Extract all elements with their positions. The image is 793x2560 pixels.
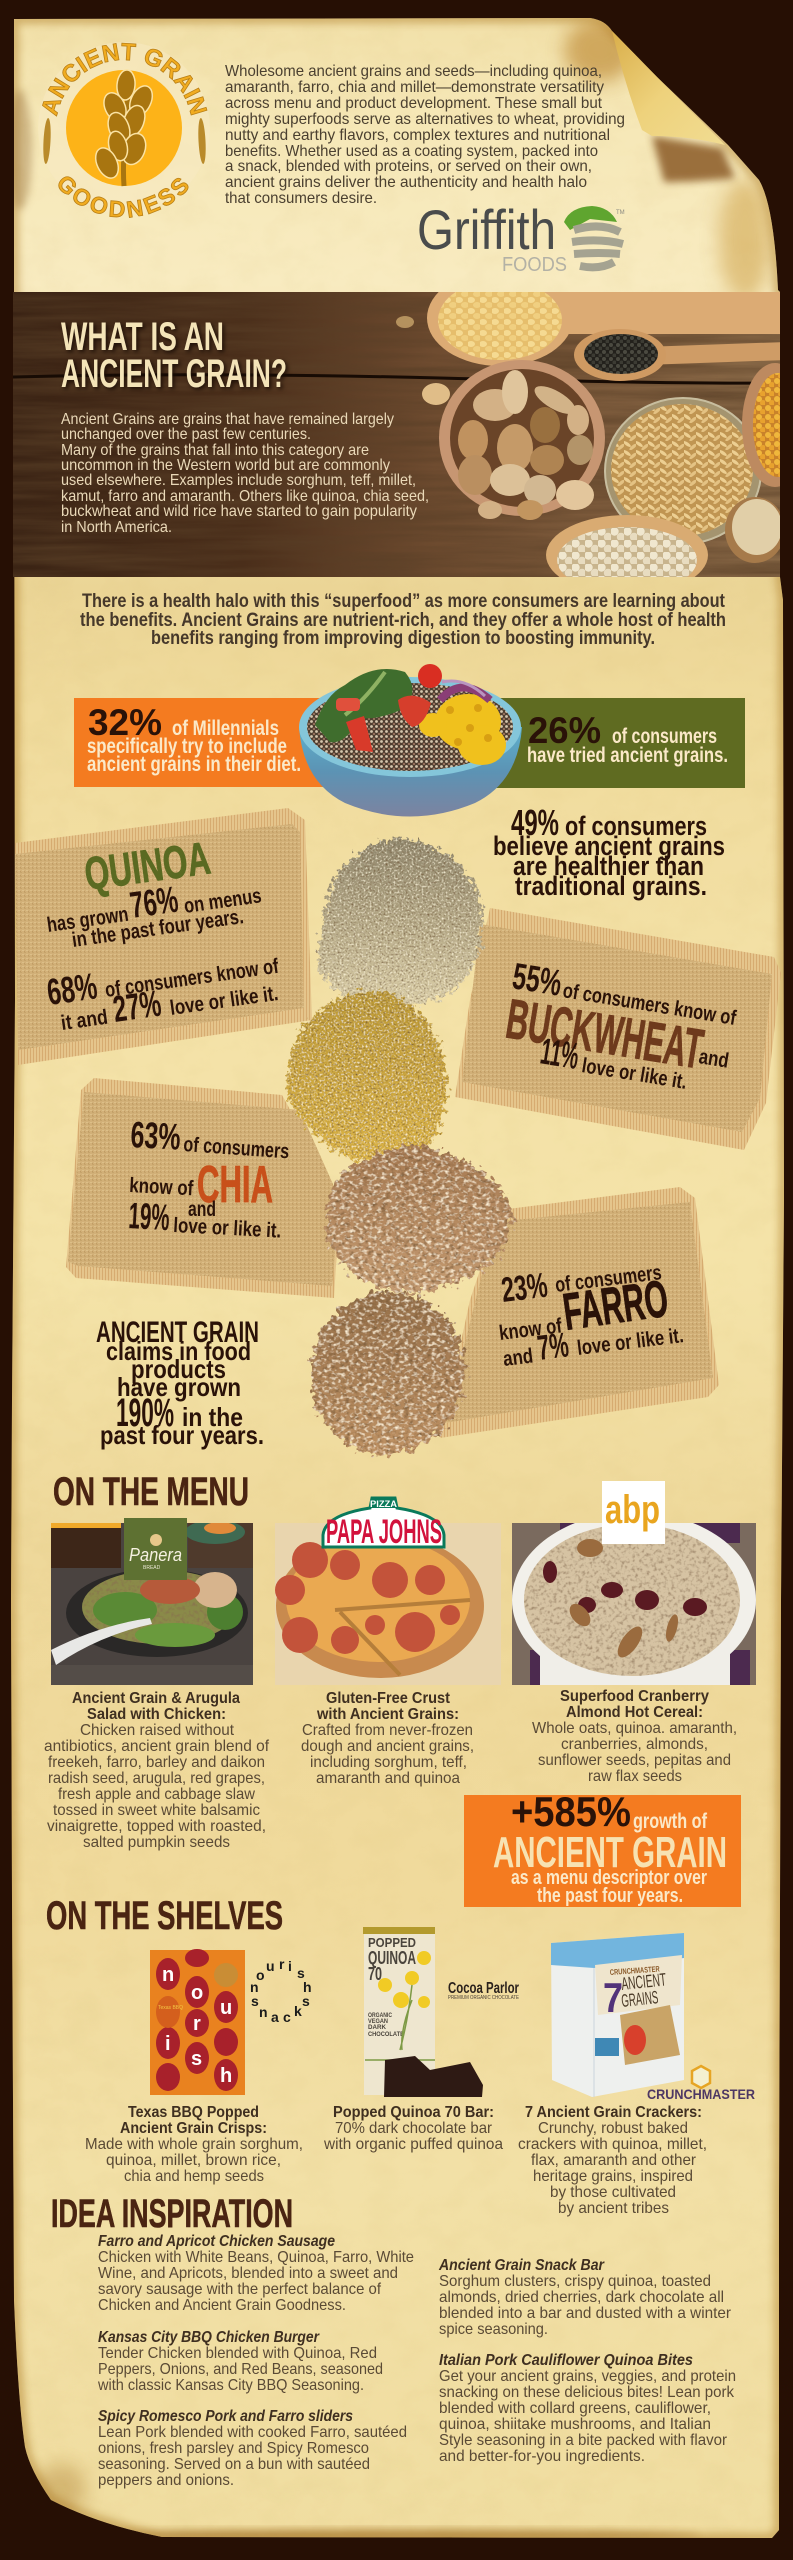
ideas: left column: Tender Chicken blended with Quinoa, Red [98,2345,377,2362]
caption: nourish: Ancient Grain Crisps: [120,2120,267,2137]
text: farro stats: 23% [499,1266,550,1310]
caption: papa johns: dough and ancient grains, [301,1738,474,1755]
callout: +585% growth: the past four years. [537,1885,683,1907]
stat: ancient grain claims: in the [182,1402,243,1432]
stat bar: 32% of millennials: of Millennials [172,717,279,740]
text: 55% of consumers: 55% [510,955,565,1004]
text: farro stats: of consumers [554,1261,663,1297]
ideas: left column: seasoning. Served on a bun with sautéed [98,2456,370,2473]
heading: WHAT IS AN [61,315,224,359]
burlap patch: chia: of consumers [183,1133,290,1163]
ideas: left column: onions, fresh parsley and Spicy Romesco [98,2440,369,2457]
caption: panera: Chicken raised without [80,1722,235,1739]
caption: abp: sunflower seeds, pepitas and [538,1752,731,1769]
product: nourish bag: n [162,1964,174,1986]
ideas: right column: spice seasoning. [439,2321,548,2338]
logo: cocoa parlor: PREMIUM ORGANIC CHOCOLATE [448,1995,520,2001]
definition text: Ancient Grains are grains that have remained largely [61,411,394,428]
callout: +585% growth: +585% [511,1788,631,1835]
product: popped quinoa bar: POPPED [368,1935,416,1950]
ideas: left column: savory sausage with the perfect balance of [98,2281,382,2298]
photo: hot cereal bowl [512,1512,756,1690]
heading: chia: CHIA [197,1156,273,1214]
caption: quinoa bar: 70% dark chocolate bar [335,2120,493,2137]
text: quinoa stats: has grown [45,903,130,937]
definition text: buckwheat and wild rice have started to gain popularity [61,503,417,520]
product: popped quinoa bar [363,1927,483,2097]
product: nourish bag: i [165,2033,171,2055]
stat: ancient grain claims: products [131,1354,226,1384]
definition text: in North America. [61,519,172,536]
stat: ancient grain claims: claims in food [106,1336,251,1366]
ideas: left column: Peppers, Onions, and Red Beans, seasoned [98,2361,383,2378]
panel: what is an ancient grain [13,292,780,577]
logo: cocoa parlor [448,1980,520,2001]
caption: crackers: heritage grains, inspired [533,2168,693,2185]
heading: quinoa: QUINOA [81,831,213,900]
ideas: left column: Wine, and Apricots, blended into a sweet and [98,2265,398,2282]
logo: papa johns: PAPA JOHNS [326,1513,442,1551]
ideas: right column: snacking on these delicious bites! Lean pork [439,2384,735,2401]
product: popped quinoa bar: CHOCOLATE [368,2032,404,2038]
caption: panera: Salad with Chicken: [87,1706,226,1723]
ideas: right column: quinoa, shiitake mushrooms, and Italian [439,2416,711,2433]
product: popped quinoa bar: 70 [368,1964,382,1984]
health halo text [80,591,726,649]
ideas: left column: Lean Pork blended with cooked Farro, sautéed [98,2424,407,2441]
logo: panera bread: Panera [129,1545,182,1565]
product: crunchmaster box: ANCIENT [620,1969,667,1994]
stat bar: 32% of millennials: 32% [88,702,162,743]
caption: abp: Whole oats, quinoa. amaranth, [532,1720,737,1737]
logo: crunchmaster [647,2066,755,2102]
ideas: right column [438,2257,736,2465]
caption: abp [532,1688,737,1785]
ideas: right column: blended into a bar and dusted with a winter [439,2305,732,2322]
logo: crunchmaster: CRUNCHMASTER [647,2086,755,2102]
stat: 49% of consumers: believe ancient grains [493,831,725,861]
caption: crackers: 7 Ancient Grain Crackers: [525,2104,702,2121]
caption: panera: fresh apple and cabbage slaw [58,1786,255,1803]
stat: 49% of consumers: 49% [511,802,559,843]
grain pile: spelt [311,1292,464,1456]
caption: abp: Almond Hot Cereal: [566,1704,703,1721]
ideas: right column: almonds, dried cherries, dark chocolate all [439,2289,724,2306]
text: quinoa stats: 76% [127,879,181,926]
callout: +585% growth [464,1788,741,1907]
stat: 49% of consumers [493,802,725,901]
tomatoes [346,716,373,752]
intro paragraph: mighty superfoods serve as alternatives to wheat, providing [225,111,625,128]
photo: papa johns pizza [275,1523,501,1685]
ideas: left column: Spicy Romesco Pork and Farro sliders [98,2408,353,2425]
intro paragraph: nutty and earthy flavors, complex textures and nutritional [225,127,610,144]
caption: panera: salted pumpkin seeds [83,1834,230,1851]
grain pile: bulgur [287,992,447,1163]
icon: left wheat sprig [42,118,52,164]
caption: papa johns: amaranth and quinoa [316,1770,460,1787]
product: popped quinoa bar: QUINOA [368,1948,416,1968]
logo: abp: abp [605,1488,660,1532]
product: popped quinoa bar: VEGAN [368,2019,388,2025]
text: 19% love or like it: and [188,1198,216,1221]
caption: papa johns [301,1690,474,1787]
burlap patch: buckwheat: of consumers know of [561,979,738,1030]
stat: ancient grain claims [96,1316,264,1450]
burlap patch: buckwheat: 11% [538,1030,582,1077]
stat bar: 26% of consumers: of consumers [612,725,717,748]
heading: ANCIENT GRAIN? [61,352,287,396]
burlap patch: chia: 19% [128,1195,171,1238]
product: crunchmaster box [551,1933,684,2097]
callout: +585% growth: as a menu descriptor over [511,1867,707,1889]
burlap patch: farro [440,1187,719,1438]
ideas: right column: and better-for-you ingredients. [439,2448,645,2465]
text: quinoa stats: 27% [110,983,164,1030]
logo: cocoa parlor: Cocoa Parlor [448,1980,519,1997]
logo: griffith foods: FOODS [502,254,567,276]
burlap patch: buckwheat [455,908,781,1150]
definition text [61,411,429,536]
logo: panera bread: BREAD [143,1565,161,1571]
intro paragraph [225,63,625,207]
text: quinoa stats: love or like it. [168,982,280,1020]
heading: farro: FARRO [560,1270,672,1342]
product: nourish bag [150,1949,245,2095]
photo: spoon with split peas [427,292,780,366]
product: nourish bag: o [191,1982,203,2004]
icon: right wheat sprig [197,118,207,164]
text: quinoa stats: it and [59,1006,109,1035]
definition text: unchanged over the past few centuries. [61,426,311,443]
product: crunchmaster box: 7 [603,1974,623,2021]
text: quinoa stats [44,879,281,1035]
ideas: right column: Style seasoning in a bite packed with flavor [439,2432,728,2449]
caption: nourish [85,2104,303,2185]
ideas: left column: with classic Kansas City BBQ Seasoning. [97,2377,364,2394]
ideas: left column: Kansas City BBQ Chicken Burger [98,2329,320,2346]
ideas: left column: Chicken and Ancient Grain Goodness. [98,2297,346,2314]
red onion [440,688,490,700]
callout: +585% growth: growth of [633,1810,708,1833]
ideas: right column: Sorghum clusters, crispy quinoa, toasted [439,2273,711,2290]
stat bar: 32% of millennials: ancient grains in their diet. [87,753,301,776]
grain pile: farro [326,1144,512,1293]
caption: papa johns: Crafted from never-frozen [302,1722,473,1739]
definition text: Many of the grains that fall into this category are [61,442,369,459]
caption: abp: raw flax seeds [588,1768,682,1785]
ideas: right column: Ancient Grain Snack Bar [438,2257,605,2274]
burlap patch: chia: know of [129,1174,195,1200]
intro paragraph: Wholesome ancient grains and seeds—including quinoa, [225,63,602,80]
product: nourish bag: Texas BBQ [158,2005,183,2011]
caption: abp: Superfood Cranberry [560,1688,709,1705]
caption: panera [44,1690,270,1851]
caption: panera: antibiotics, ancient grain blend of [44,1738,270,1755]
product: nourish bag: r [193,2013,201,2035]
text: farro stats: and [502,1344,534,1371]
stat: 49% of consumers: of consumers [565,811,707,841]
product: popped quinoa bar: DARK [368,2025,387,2031]
caption: nourish: quinoa, millet, brown rice, [106,2152,281,2169]
caption: crackers: crackers with quinoa, millet, [518,2136,707,2153]
caption: panera: freekeh, farro, barley and daikon [48,1754,265,1771]
heading: idea inspiration: IDEA INSPIRATION [51,2192,293,2236]
corn [419,694,506,765]
logo: ancient grain goodness badge [39,42,210,218]
icon: orange circle [66,70,182,186]
intro paragraph: across menu and product development. These small but [225,95,603,112]
product: crunchmaster box: GRAINS [620,1987,659,2011]
health halo text: benefits ranging from improving digestion to boosting immunity. [151,628,655,649]
caption: crackers [518,2104,707,2217]
intro paragraph: ancient grains deliver the authenticity and health halo [225,174,587,191]
text: quinoa stats: 68% [44,965,100,1013]
ideas: left column: Chicken with White Beans, Quinoa, Farro, White [98,2249,414,2266]
wood background [13,292,780,577]
stat: ancient grain claims: 190% [116,1391,174,1435]
text: 63% of consumers: 63% [130,1114,182,1158]
stat: ancient grain claims: past four years. [100,1420,264,1450]
caption: panera: vinaigrette, topped with roasted, [47,1818,266,1835]
caption: papa johns: with Ancient Grains: [316,1706,459,1723]
product: nourish bag: h [220,2065,232,2087]
product: popped quinoa bar: ORGANIC [368,2013,393,2019]
product: nourish bag: s [191,2048,202,2070]
caption: nourish: chia and hemp seeds [124,2168,264,2185]
caption: panera: tossed in sweet white balsamic [53,1802,260,1819]
stat bar: 32% of millennials: specifically try to include [87,735,287,758]
intro paragraph: that consumers desire. [225,190,377,207]
heading: on the menu: ON THE MENU [53,1470,249,1514]
text: quinoa stats: on menus [182,884,263,918]
greens [315,669,412,742]
stat: ancient grain claims: have grown [117,1372,241,1402]
heading [61,315,287,396]
heading: on the shelves: ON THE SHELVES [46,1894,283,1938]
ideas: right column: blended with collard greens, cauliflower, [439,2400,711,2417]
text: farro stats [498,1261,685,1371]
arc text: ancient grain: ANCIENT GRAIN [42,42,208,117]
logo: panera bread [124,1518,187,1580]
caption: panera: Ancient Grain & Arugula [72,1690,240,1707]
caption: crackers: by those cultivated [550,2184,676,2201]
photo: bowl of corn [742,363,780,487]
photo: panera salad [51,1520,253,1685]
caption: nourish: Texas BBQ Popped [128,2104,259,2121]
stat bar: 32% of millennials [74,698,344,787]
burlap patch: buckwheat: love or like it. [580,1054,689,1094]
caption: abp: cranberries, almonds, [561,1736,708,1753]
definition text: used elsewhere. Examples include sorghum, teff, millet, [61,472,416,489]
icon: wheat ear [91,69,157,186]
photo: bowl of fava beans [439,360,605,520]
intro paragraph: benefits. Whether used as a coating system, packed into [225,143,598,160]
logo: griffith foods: Griffith [417,198,556,261]
photo: spoon with peppercorns [574,329,782,381]
product: nourish bag: u [220,1997,232,2019]
intro paragraph: amaranth, farro, chia and millet—demonstrate versatility [225,79,604,96]
text: farro stats: love or like it. [576,1324,685,1360]
logo: griffith foods: TM [616,210,625,216]
stat: ancient grain claims: ANCIENT GRAIN [96,1316,259,1349]
stat: 49% of consumers: are healthier than [513,851,704,881]
text: quinoa stats: of consumers know of [103,955,281,1002]
logo: griffith foods [417,198,625,276]
text: farro stats: 7% [535,1325,571,1368]
caption: crackers: flax, amaranth and other [531,2152,697,2169]
grain pile: quinoa [318,838,482,1004]
caption: crackers: by ancient tribes [558,2200,669,2217]
stat bar: 26% of consumers: 26% [528,710,601,751]
stat: 49% of consumers: traditional grains. [515,871,707,901]
caption: quinoa bar [323,2104,503,2153]
burlap patch: chia: love or like it. [173,1214,282,1243]
logo: papa johns [323,1498,444,1551]
caption: papa johns: including sorghum, teff, [310,1754,467,1771]
photo: small bowl of oats [725,497,785,563]
definition text: kamut, farro and amaranth. Others like quinoa, chia seed, [61,488,429,505]
logo: nourish snacks: nourishsnacks [250,1956,312,2025]
arc text: goodness: GOODNESS [58,176,188,218]
ideas: left column: peppers and onions. [98,2472,234,2489]
caption: papa johns: Gluten-Free Crust [326,1690,451,1707]
intro paragraph: a snack, blended with proteins, or served on their own, [225,158,592,175]
text: farro stats: know of [498,1314,564,1345]
caption: nourish: Made with whole grain sorghum, [85,2136,303,2153]
icon: grain salad bowl [299,664,522,816]
ideas: left column [97,2233,414,2489]
text: quinoa stats: in the past four years. [70,905,245,952]
stat bar: 26% of consumers: have tried ancient grains. [527,744,728,767]
photo: glass bowl of barley [605,398,761,544]
ideas: right column: Get your ancient grains, veggies, and protein [439,2368,736,2385]
caption: panera: radish seed, arugula, red grapes, [48,1770,265,1787]
burlap patch: quinoa [15,808,312,1065]
caption: quinoa bar: Popped Quinoa 70 Bar: [333,2104,494,2121]
stat bar: 26% of consumers [480,698,745,788]
photo: spoon of white beans [546,515,708,577]
ideas: right column: Italian Pork Cauliflower Quinoa Bites [439,2352,693,2369]
logo: papa johns: PIZZA [370,1499,398,1509]
burlap patch: chia [66,1078,340,1298]
definition text: uncommon in the Western world but are commonly [61,457,390,474]
ideas: left column: Farro and Apricot Chicken Sausage [98,2233,335,2250]
text: 11% love or like it: and [697,1045,730,1073]
caption: crackers: Crunchy, robust baked [538,2120,688,2137]
caption: quinoa bar: with organic puffed quinoa [323,2136,503,2153]
logo: abp [602,1481,665,1544]
product: crunchmaster box: CRUNCHMASTER [610,1965,660,1977]
page curl at top right [612,31,725,145]
